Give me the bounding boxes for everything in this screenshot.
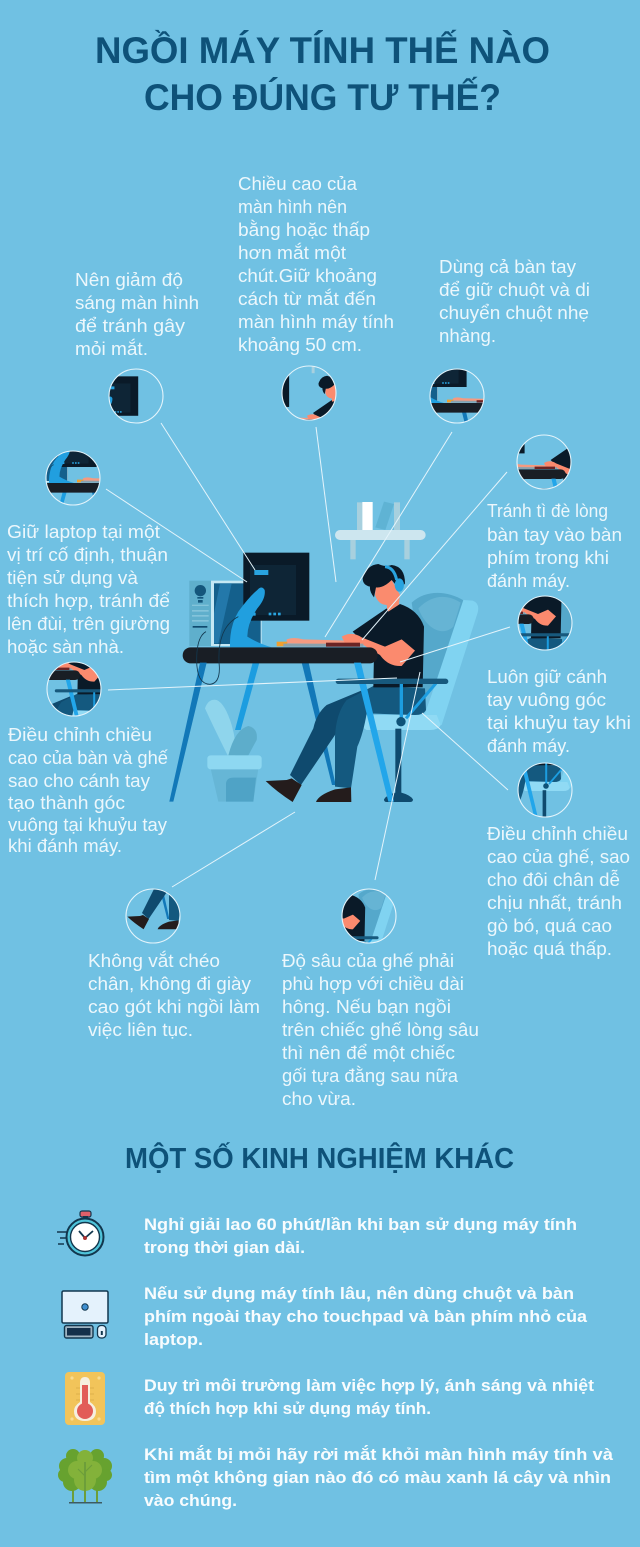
text: elbow angle: tại khuỷu tay khi <box>487 713 631 733</box>
monitor arm <box>230 587 272 647</box>
illustration: person at desk <box>169 502 478 802</box>
text: seat depth: cho vừa. <box>282 1089 356 1109</box>
detail circle: chair height <box>517 762 572 818</box>
second screen <box>211 581 262 646</box>
detail circle: palm on keyboard <box>516 434 572 490</box>
text: mouse: để giữ chuột và di <box>439 280 590 300</box>
wall shelf with books <box>335 502 426 559</box>
text: chair height: gò bó, quá cao <box>487 916 612 936</box>
text: elbow angle: đánh máy. <box>487 736 570 756</box>
detail circle: desk and chair height <box>46 662 102 716</box>
text: tip 4: tìm một không gian nào đó có màu xanh lá cây và nhìn <box>144 1468 611 1487</box>
text: tip 1: Nghỉ giải lao 60 phút/lần khi bạn sử dụng máy tính <box>144 1215 577 1234</box>
shirt <box>353 604 424 687</box>
text: brightness: sáng màn hình <box>75 293 199 313</box>
potted plant <box>205 700 262 802</box>
text: tip 3 <box>144 1376 594 1418</box>
text: tip 2: Nếu sử dụng máy tính lâu, nên dùng chuột và bàn <box>144 1284 574 1303</box>
text: laptop position: thích hợp, tránh để <box>7 591 170 611</box>
text: brightness: để tránh gây <box>75 316 185 336</box>
text: tip 2 <box>144 1284 588 1349</box>
text: tip 3: Duy trì môi trường làm việc hợp lý, ánh sáng và nhiệt <box>144 1376 594 1395</box>
text: chair height: chịu nhất, tránh <box>487 893 622 913</box>
text: palm on keyboard: phím trong khi <box>487 548 609 568</box>
detail circle: seat depth <box>341 888 396 944</box>
text: chair height: cho đôi chân dễ <box>487 869 620 890</box>
near arm <box>342 634 415 666</box>
text: mouse <box>439 257 590 346</box>
text: palm on keyboard: Tránh tì đè lòng <box>487 501 608 521</box>
text: screen height: hơn mắt một <box>238 242 346 263</box>
headset <box>385 567 397 580</box>
text: laptop position: lên đùi, trên giường <box>7 614 170 634</box>
neck and face <box>375 580 400 613</box>
text: chair height <box>487 824 630 959</box>
computer tower <box>189 581 211 646</box>
text: seat depth: Độ sâu của ghế phải <box>282 951 454 971</box>
leader lines <box>106 423 510 887</box>
chair <box>363 593 478 802</box>
text: tip 2: laptop. <box>144 1330 203 1349</box>
text: feet: cao gót khi ngồi làm <box>88 997 260 1017</box>
text: screen height: màn hình nên <box>238 197 347 217</box>
text: screen height <box>238 174 394 355</box>
text: feet: chân, không đi giày <box>88 974 251 994</box>
detail circle: feet <box>125 888 180 944</box>
heading: other tips: MỘT SỐ KINH NGHIỆM KHÁC <box>125 1141 514 1175</box>
text: chair height: Điều chỉnh chiều <box>487 824 628 844</box>
text: elbow angle: Luôn giữ cánh <box>487 667 607 687</box>
text: brightness: mỏi mắt. <box>75 338 148 359</box>
near table legs <box>169 663 394 802</box>
text: chair height: hoặc quá thấp. <box>487 939 612 959</box>
text: screen height: cách từ mắt đến <box>238 288 376 309</box>
text: desk and chair height: khi đánh máy. <box>8 836 122 856</box>
text: seat depth <box>282 951 479 1109</box>
text: mouse: chuyển chuột nhẹ <box>439 303 589 323</box>
title <box>95 29 550 118</box>
text: tip 4: Khi mắt bị mỏi hãy rời mắt khỏi màn hình máy tính và <box>144 1445 614 1464</box>
text: seat depth: hông. Nếu bạn ngồi <box>282 997 451 1017</box>
text: seat depth: gối tựa đằng sau nữa <box>282 1065 459 1086</box>
text: laptop position: tiện sử dụng và <box>7 568 139 588</box>
text: elbow angle: tay vuông góc <box>487 690 606 710</box>
text: mouse: Dùng cả bàn tay <box>439 257 576 277</box>
text: seat depth: thì nên để một chiếc <box>282 1043 455 1063</box>
text: chair height: cao của ghế, sao <box>487 847 630 867</box>
text: desk and chair height: cao của bàn và ghế <box>8 748 168 768</box>
text: screen height: khoảng 50 cm. <box>238 335 362 355</box>
far leg <box>290 688 367 785</box>
text: laptop position: vị trí cố định, thuận <box>7 545 168 565</box>
title: CHO ĐÚNG TƯ THẾ? <box>144 76 501 118</box>
detail circle: laptop position <box>45 450 100 506</box>
desk top <box>183 647 378 663</box>
title: NGỒI MÁY TÍNH THẾ NÀO <box>95 29 550 71</box>
icon: trees <box>58 1449 112 1504</box>
text: seat depth: phù hợp với chiều dài <box>282 974 464 994</box>
icon: stopwatch <box>57 1211 104 1256</box>
text: laptop position <box>7 522 170 657</box>
far table legs <box>235 663 336 785</box>
text: tip 4 <box>144 1445 614 1510</box>
text: screen height: Chiều cao của <box>238 174 358 194</box>
text: palm on keyboard: bàn tay vào bàn <box>487 525 622 545</box>
text: tip 3: độ thích hợp khi sử dụng máy tính. <box>144 1399 431 1418</box>
text: tip 1 <box>144 1215 577 1257</box>
icon: computer, keyboard and mouse <box>62 1291 108 1338</box>
text: palm on keyboard: đánh máy. <box>487 571 570 591</box>
person <box>266 564 426 802</box>
text: tip 4: vào chúng. <box>144 1491 237 1510</box>
text: elbow angle <box>487 667 631 756</box>
far forearm <box>287 638 358 645</box>
near leg and hip <box>335 686 426 788</box>
hair <box>363 564 405 597</box>
keyboard <box>277 642 363 647</box>
text: desk and chair height: sao cho cánh tay <box>8 771 150 791</box>
text: feet: việc liên tục. <box>88 1020 193 1040</box>
right shoe <box>316 787 351 802</box>
detail circle: mouse hand <box>429 368 484 424</box>
text: mouse: nhàng. <box>439 326 496 346</box>
cable <box>197 617 238 684</box>
detail circle: monitor brightness <box>108 368 164 424</box>
armrest <box>336 679 448 726</box>
text: tip 2: phím ngoài thay cho touchpad và bàn phím nhỏ của <box>144 1307 588 1326</box>
icon: thermometer <box>65 1372 105 1425</box>
text: desk and chair height: vuông tại khuỷu tay <box>8 815 167 835</box>
text: laptop position: Giữ laptop tại một <box>7 522 160 542</box>
text: screen height: màn hình máy tính <box>238 312 394 332</box>
text: desk and chair height <box>8 725 168 856</box>
left shoe <box>266 778 302 802</box>
text: brightness <box>75 270 199 359</box>
text: desk and chair height: Điều chỉnh chiều <box>8 725 152 745</box>
text: palm on keyboard <box>487 501 622 591</box>
main monitor <box>243 553 309 621</box>
text: feet: Không vắt chéo <box>88 950 220 971</box>
text: screen height: bằng hoặc thấp <box>238 219 370 240</box>
text: laptop position: hoặc sàn nhà. <box>7 637 124 657</box>
text: tip 1: trong thời gian dài. <box>144 1238 305 1257</box>
detail circle: screen height <box>281 366 336 420</box>
text: feet <box>88 950 260 1040</box>
text: desk and chair height: tạo thành góc <box>8 793 125 813</box>
detail circle: elbow angle <box>517 596 572 650</box>
text: brightness: Nên giảm độ <box>75 270 183 290</box>
text: seat depth: trên chiếc ghế lòng sâu <box>282 1020 479 1040</box>
text: screen height: chút.Giữ khoảng <box>238 266 377 286</box>
